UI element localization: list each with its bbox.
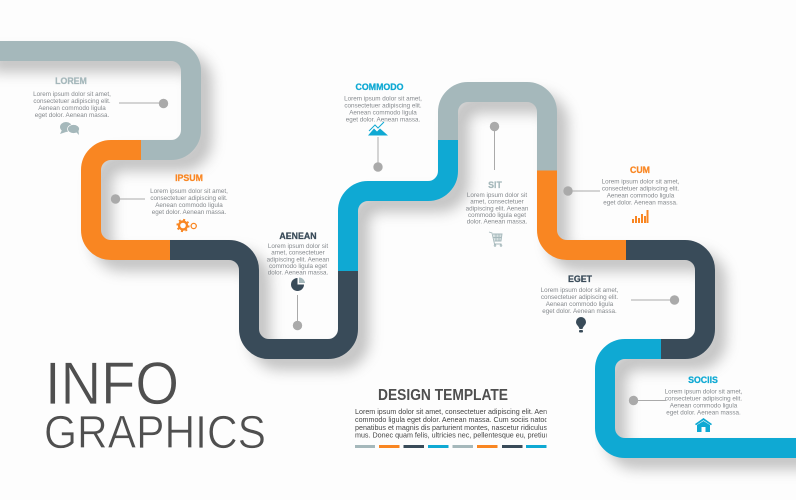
text block — [344, 96, 422, 124]
description paragraph: mus. Donec quam felis, ultricies nec, pellentesque eu, pretium — [355, 432, 552, 440]
heading: IPSUM — [175, 173, 203, 183]
text block: Lorem ipsum dolor sit amet, — [541, 287, 619, 294]
text block: Lorem ipsum dolor sit — [268, 243, 328, 250]
icon: house — [695, 418, 712, 432]
text block: Lorem ipsum dolor sit amet, — [344, 96, 422, 102]
text block: consectetuer adipiscing elit. — [344, 102, 422, 110]
text block: eget dolor. Aenean massa. — [666, 410, 741, 416]
segment: ipsum — [91, 150, 171, 250]
text block: eget dolor. Aenean massa. — [542, 308, 617, 315]
text block: eget dolor. Aenean massa. — [152, 209, 227, 216]
heading: SOCIIS — [688, 375, 718, 385]
text block: Aenean commodo ligula — [607, 192, 675, 200]
text block: Aenean commodo ligula — [155, 202, 223, 209]
step: aenean — [267, 231, 330, 330]
text block: Lorem ipsum dolor sit amet, — [33, 91, 111, 98]
connector — [490, 122, 499, 170]
connector — [563, 186, 600, 196]
connector — [373, 137, 383, 172]
description paragraph: commodo ligula eget dolor. Aenean massa. Cum sociis natoque — [355, 416, 556, 424]
text block: consectetuer adipiscing elit. — [602, 186, 679, 192]
description paragraph: Lorem ipsum dolor sit amet, consectetuer adipiscing elit. Aenean — [355, 408, 559, 416]
icon: speech bubbles — [60, 122, 80, 135]
segment: sociis — [605, 349, 796, 448]
text block — [541, 287, 619, 315]
step: sociis — [629, 375, 743, 432]
step: cum — [563, 165, 680, 223]
text block: Lorem ipsum dolor sit — [467, 192, 527, 199]
heading: AENEAN — [279, 231, 317, 241]
segment: aenean — [170, 250, 348, 349]
text block: eget dolor. Aenean massa. — [346, 116, 421, 124]
heading: LOREM — [55, 76, 87, 86]
heading: CUM — [630, 165, 650, 175]
text block: adipiscing elit. Aenean — [267, 256, 330, 263]
title line: info: INFO — [45, 350, 179, 417]
text block: Aenean commodo ligula — [38, 105, 106, 112]
winding road path — [0, 51, 796, 448]
text block — [150, 188, 228, 216]
step: commodo — [344, 82, 422, 172]
text block: dolor. Aenean massa. — [467, 219, 528, 226]
design template heading: DESIGN TEMPLATE — [378, 387, 508, 404]
heading: SIT — [488, 180, 502, 190]
step: lorem — [33, 76, 168, 135]
text block: commodo ligula eget — [269, 263, 327, 270]
step: sit — [466, 122, 529, 246]
description paragraph: penatibus et magnis dis parturient montes, nascetur ridiculus — [355, 424, 548, 432]
connector — [111, 194, 145, 204]
step: ipsum — [111, 173, 228, 231]
segment: commodo — [348, 139, 448, 271]
text block: consectetuer adipiscing elit. — [150, 195, 228, 202]
heading: EGET — [568, 274, 593, 284]
icon: pie chart — [291, 277, 305, 291]
segment: lorem — [0, 51, 191, 150]
text block: amet, consectetuer — [271, 250, 325, 257]
text block: Aenean commodo ligula — [546, 301, 614, 308]
icon: bar chart — [632, 210, 648, 223]
connector — [631, 295, 679, 305]
segment: eget — [626, 250, 705, 349]
text block: dolor. Aenean massa. — [268, 270, 329, 277]
text block: Aenean commodo ligula — [349, 110, 417, 116]
segment: sit — [448, 92, 547, 171]
path shadow — [0, 62, 796, 459]
description paragraph — [355, 408, 559, 440]
connector — [293, 295, 302, 330]
text block: Lorem ipsum dolor sit amet, — [150, 188, 228, 195]
text block: consectetuer adipiscing elit. — [541, 294, 618, 301]
text block — [466, 192, 529, 226]
step: eget — [541, 274, 679, 332]
connector — [629, 396, 666, 405]
icon: shopping cart — [489, 232, 502, 246]
icon: mountains — [368, 122, 388, 136]
icon: gears — [177, 220, 196, 231]
text block: Lorem ipsum dolor sit amet, — [602, 178, 680, 186]
text block: eget dolor. Aenean massa. — [35, 112, 110, 119]
icon: light bulb — [576, 317, 586, 332]
text block: consectetuer adipiscing elit. — [33, 98, 111, 105]
text block: adipiscing elit. Aenean — [466, 205, 529, 212]
text block: Aenean commodo ligula — [670, 402, 738, 410]
text block — [33, 91, 111, 119]
text block: commodo ligula eget — [468, 212, 526, 219]
text block — [602, 178, 680, 206]
segment: cum — [547, 170, 627, 250]
text block: Lorem ipsum dolor sit amet, — [665, 388, 743, 396]
text block: amet, consectetuer — [470, 199, 524, 206]
text block — [267, 243, 330, 277]
title — [44, 350, 266, 458]
color legend dashes — [355, 445, 546, 448]
title line: graphics: GRAPHICS — [44, 406, 266, 458]
heading: COMMODO — [356, 82, 404, 92]
text block: consectetuer adipiscing elit. — [665, 396, 742, 402]
connector — [119, 99, 168, 108]
text block: eget dolor. Aenean massa. — [603, 200, 678, 206]
text block — [665, 388, 743, 416]
